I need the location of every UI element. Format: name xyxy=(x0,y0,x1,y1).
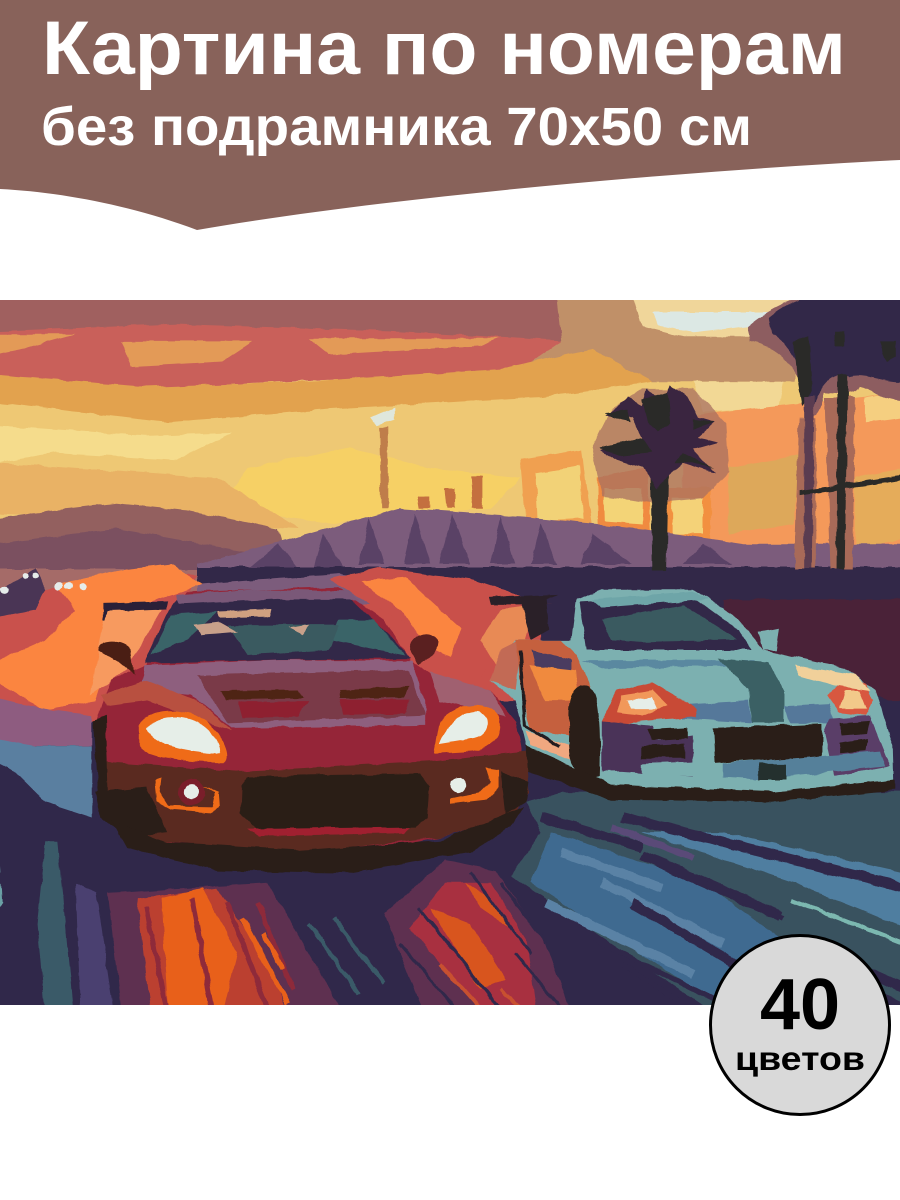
red car xyxy=(93,587,529,873)
blue car xyxy=(488,589,895,802)
distant car lights xyxy=(1,573,88,594)
road and smoke xyxy=(0,564,900,1019)
headlights xyxy=(139,711,226,762)
bumper shadow xyxy=(111,807,523,873)
painting: racing cars at sunset xyxy=(0,286,900,1019)
road streaks: right blues xyxy=(511,792,900,1014)
distant hills xyxy=(0,504,282,592)
title: Картина по номерам xyxy=(42,6,846,91)
palm trees xyxy=(592,291,900,571)
windshield xyxy=(144,596,410,663)
mirrors xyxy=(99,642,134,675)
spoiler xyxy=(104,601,169,620)
header banner xyxy=(0,0,900,230)
sky xyxy=(0,300,900,545)
badge: 40 colours: цветов xyxy=(735,1040,865,1077)
badge: 40 colours xyxy=(710,936,890,1114)
fenders xyxy=(101,680,232,731)
road streaks: left xyxy=(37,842,74,1014)
power line xyxy=(799,475,900,495)
hood xyxy=(141,660,425,728)
grille xyxy=(241,773,430,830)
road streaks: right reds xyxy=(384,860,571,1014)
lower body xyxy=(99,751,529,852)
fog lights xyxy=(154,777,220,813)
badge: 40 colours: 40 xyxy=(760,965,840,1045)
fence and embankment xyxy=(197,407,900,620)
subtitle: без подрамника 70х50 см xyxy=(41,97,752,157)
